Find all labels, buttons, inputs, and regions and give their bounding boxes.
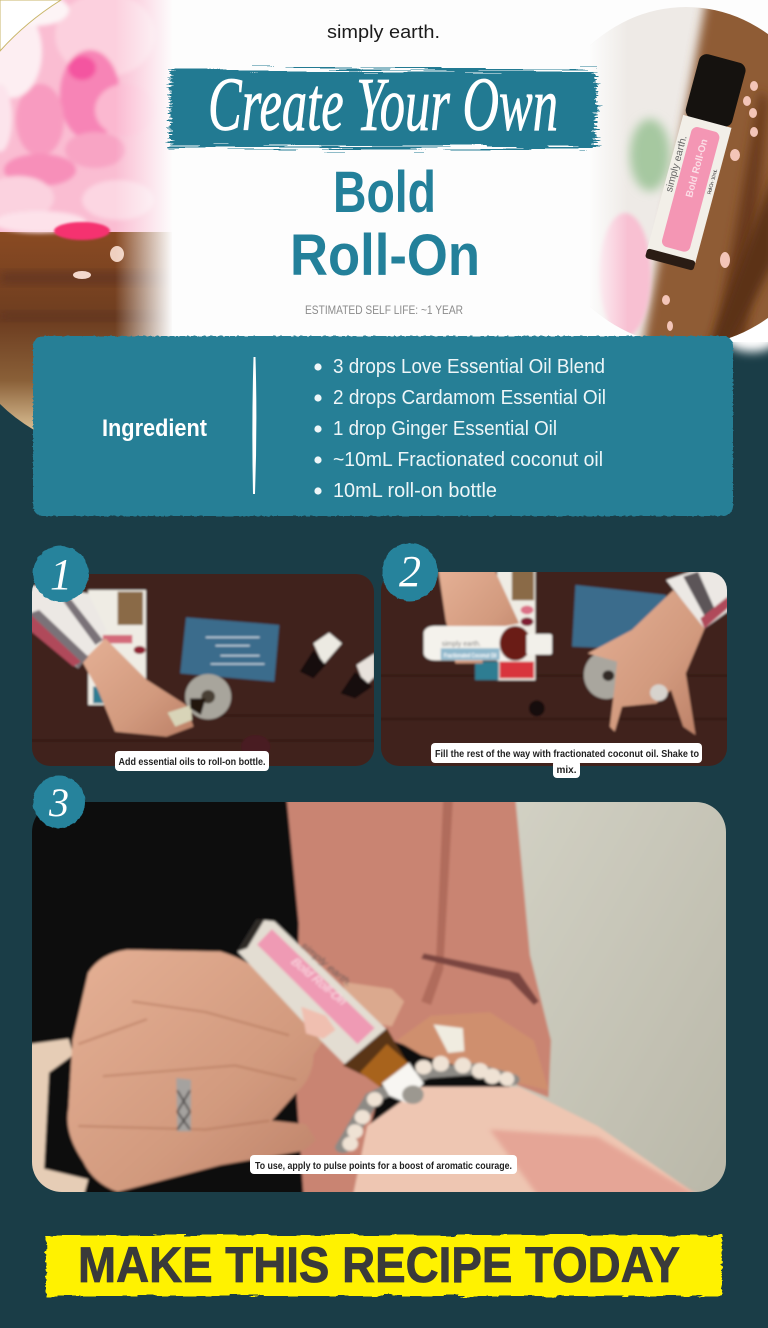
ingredient list: 1 drop Ginger Essential Oil (333, 417, 557, 440)
bottle (645, 52, 748, 271)
badge: step 2 (382, 543, 438, 601)
corner arc (0, 0, 61, 51)
recipe title: Bold (333, 160, 436, 225)
header area (0, 0, 768, 440)
caption: step 2: mix. (556, 765, 577, 776)
photo: step 3 (26, 795, 735, 1198)
ingredient heading: Ingredient (102, 415, 207, 442)
caption: step 3 (250, 1155, 517, 1174)
photo: roll-on bottle on wood (598, 7, 768, 338)
brush banner (170, 63, 596, 148)
photo: step 3: simply earth. (297, 942, 355, 988)
caption: step 2: Fill the rest of the way with fractionated coconut oil. Shake to (435, 749, 699, 760)
photo: step 1 (28, 570, 382, 770)
recipe title: Roll-On (290, 223, 480, 288)
caption: step 1 (115, 751, 269, 771)
photo: pink flower on wood (0, 0, 171, 430)
recipe title (290, 160, 480, 288)
photo: step 2: simply earth. (442, 640, 481, 648)
ingredient list: 10mL roll-on bottle (333, 479, 497, 502)
caption: step 3: To use, apply to pulse points for a boost of aromatic courage. (255, 1161, 512, 1172)
badge: step 2: 2 (399, 547, 421, 596)
caption: step 1: Add essential oils to roll-on bottle. (118, 757, 266, 768)
bottle: Roll-On · 10 mL (707, 168, 719, 195)
call to action banner: MAKE THIS RECIPE TODAY (78, 1237, 680, 1293)
photo: step 3: Bold Roll-On (287, 956, 351, 1007)
panel: ingredients (33, 336, 733, 516)
ingredient list: ~10mL Fractionated coconut oil (333, 448, 603, 471)
ingredient list (314, 355, 606, 502)
bottle: Bold Roll-On (684, 138, 710, 199)
badge: step 1 (33, 546, 89, 602)
badge: step 3: 3 (48, 780, 69, 825)
hand holding bottle (343, 982, 404, 1026)
photo: step 2: Fractionated Coconut Oil (444, 651, 497, 659)
bracelet (342, 1025, 514, 1151)
ingredient list: 3 drops Love Essential Oil Blend (333, 355, 605, 378)
logo: simply earth. (327, 22, 440, 42)
bottle (238, 920, 387, 1067)
badge: step 3 (33, 776, 85, 828)
caption: step 2 (431, 743, 702, 778)
bottle: simply earth. (664, 134, 690, 193)
script title: Create Your Own (208, 63, 558, 147)
shelf life note: ESTIMATED SELF LIFE: ~1 YEAR (305, 305, 463, 317)
badge: step 1: 1 (50, 550, 72, 599)
ingredient list: 2 drops Cardamom Essential Oil (333, 386, 606, 409)
photo: step 2 (377, 568, 735, 770)
